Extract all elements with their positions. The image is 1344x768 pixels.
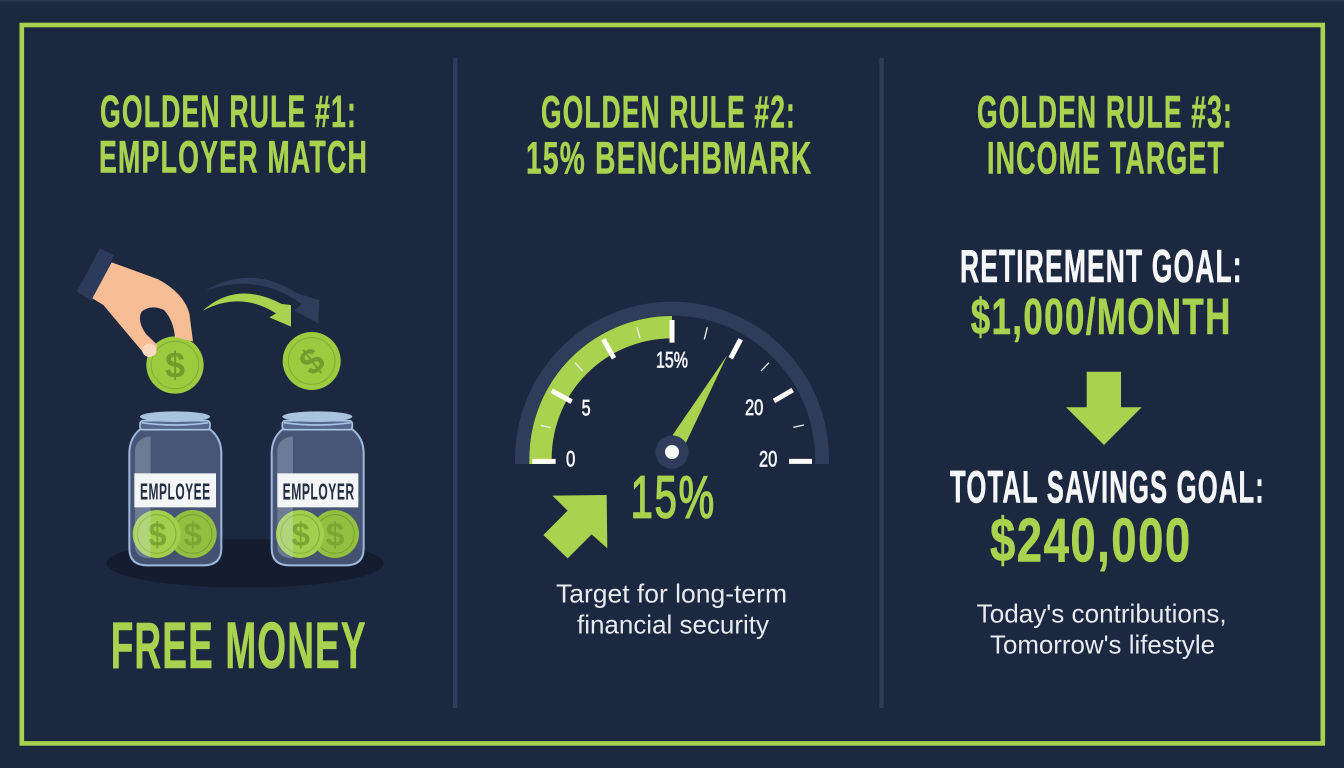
heading: golden rule 1 xyxy=(99,86,368,182)
panel: rule 2 15% benchmark xyxy=(515,86,829,639)
icon: hand xyxy=(92,262,193,357)
arrow: navy shadow arc xyxy=(205,278,319,323)
jar shadow xyxy=(106,539,384,588)
jar: employer xyxy=(272,411,364,565)
value: monthly goal: $1,000/MONTH xyxy=(971,288,1232,345)
icon: coin held by hand xyxy=(146,336,204,394)
heading: golden rule 1: EMPLOYER MATCH xyxy=(99,132,368,182)
text: closing caption xyxy=(977,598,1227,659)
gauge track xyxy=(515,302,829,464)
jar: employer: $ xyxy=(291,517,310,554)
gauge scale labels: 0 xyxy=(566,447,575,472)
icon: falling coin: $ xyxy=(291,339,332,383)
gauge fill to 15% xyxy=(529,316,672,464)
arrow: green arc xyxy=(202,294,291,327)
arrow: down xyxy=(1066,372,1142,445)
heading: golden rule 1: GOLDEN RULE #1: xyxy=(100,86,357,137)
text: gauge caption: financial security xyxy=(577,609,769,639)
gauge scale labels: 20 xyxy=(759,447,777,472)
heading: golden rule 2: GOLDEN RULE #2: xyxy=(541,86,796,137)
icon: falling coin xyxy=(283,332,341,390)
jar: employer: EMPLOYER xyxy=(283,478,355,504)
panel: rule 1 employer match xyxy=(77,86,384,682)
jar: employee: $ xyxy=(183,517,202,554)
callout: free money: FREE MONEY xyxy=(111,608,367,682)
text: gauge caption: Target for long-term xyxy=(556,578,787,608)
jar: employee: $ xyxy=(148,517,167,554)
jar: employee: EMPLOYEE xyxy=(140,478,211,504)
arrow: up-right green xyxy=(543,495,607,558)
heading: golden rule 2 xyxy=(526,86,812,184)
text: gauge caption xyxy=(556,578,787,639)
icon: shirt cuff xyxy=(77,248,114,301)
chart: savings gauge xyxy=(515,302,829,558)
jar: employer: $ xyxy=(326,517,345,554)
panel: rule 3 income target xyxy=(950,86,1265,659)
gauge hub xyxy=(655,435,689,469)
text: closing caption: Tomorrow's lifestyle xyxy=(990,629,1215,659)
value: 15%: 15% xyxy=(631,464,716,530)
illustration: hand, coins and jars xyxy=(77,248,384,588)
gauge scale labels: 20 xyxy=(745,395,763,420)
value: total savings: $240,000 xyxy=(990,507,1192,576)
gauge scale labels: 5 xyxy=(582,395,591,420)
gauge scale labels xyxy=(566,348,777,472)
heading: golden rule 2: 15% BENCHBMARK xyxy=(526,132,812,184)
gauge needle xyxy=(673,355,727,443)
jar: employee xyxy=(129,411,221,565)
gauge scale labels: 15% xyxy=(656,348,688,373)
text: closing caption: Today's contributions, xyxy=(977,598,1227,628)
icon: coin held by hand: $ xyxy=(165,345,185,386)
heading: golden rule 3 xyxy=(977,86,1233,184)
